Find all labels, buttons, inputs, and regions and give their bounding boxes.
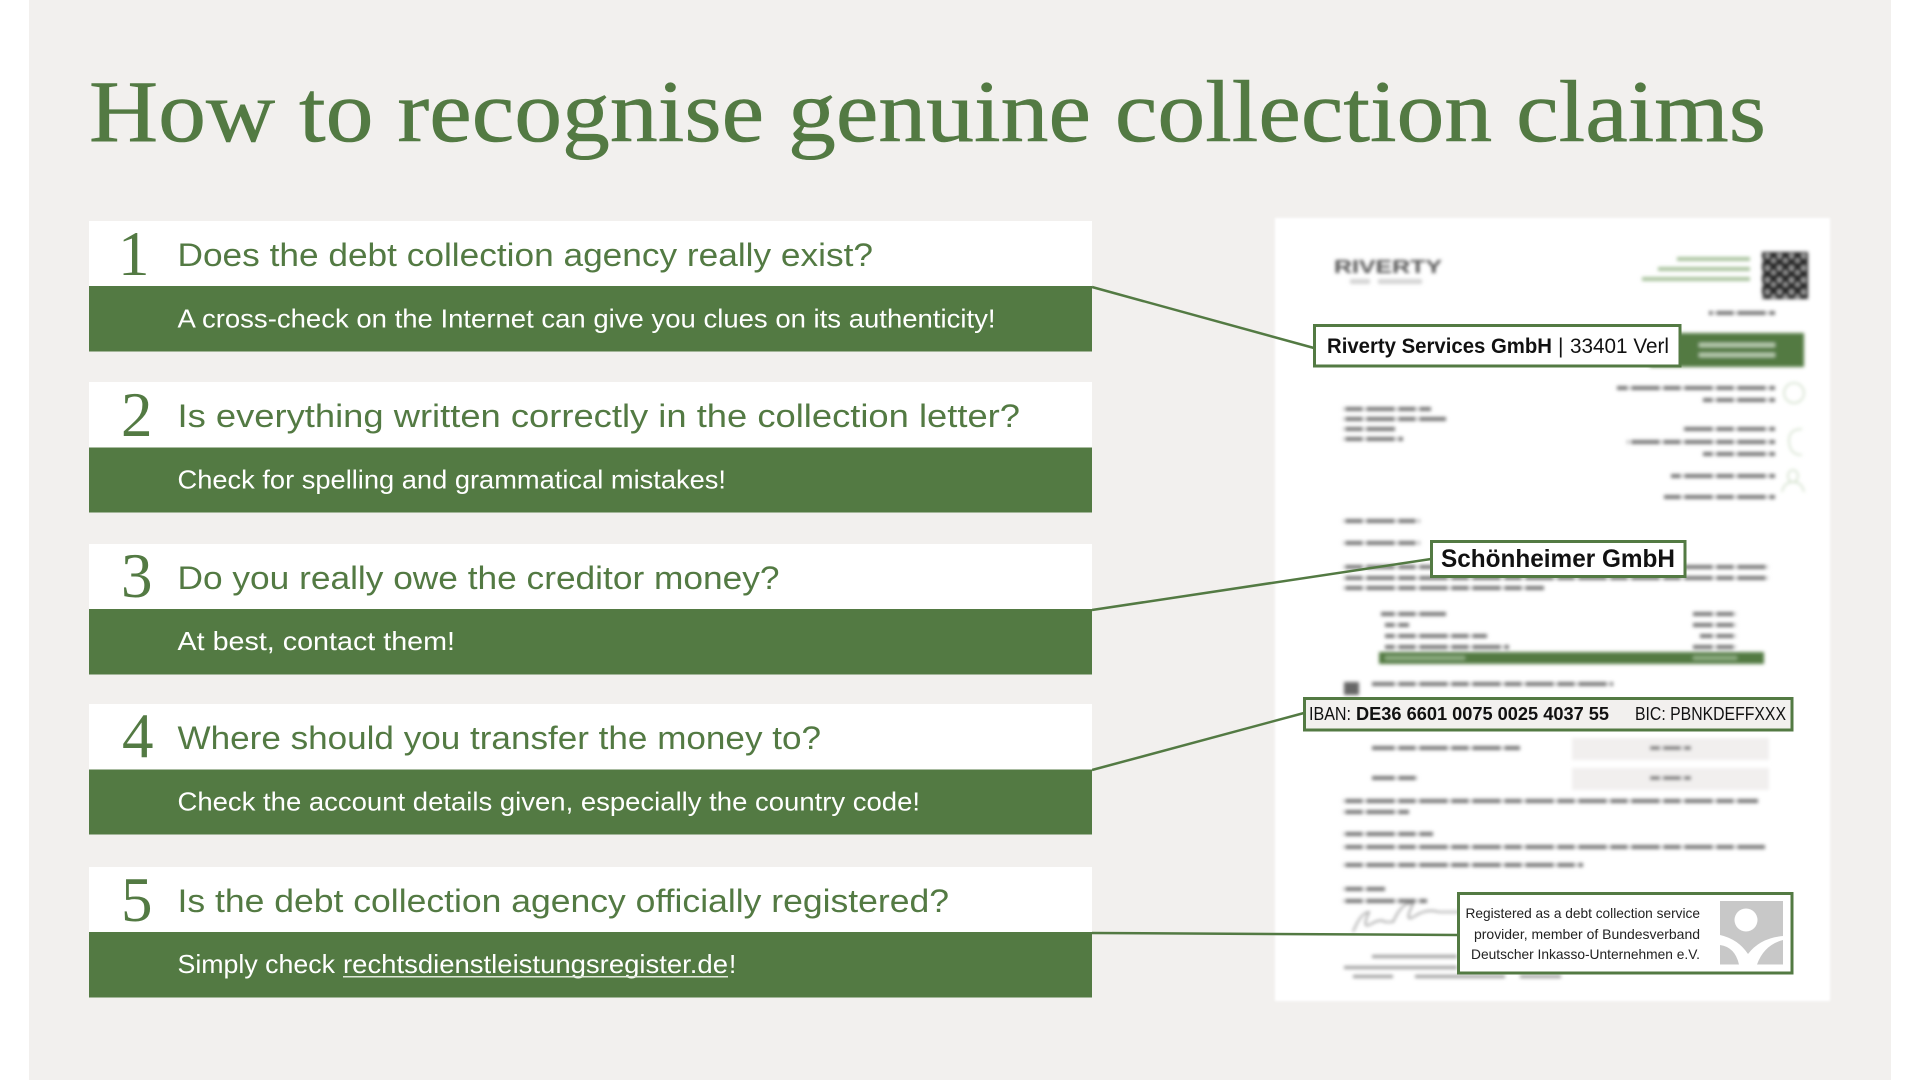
answer 5: Simply check <box>178 949 336 979</box>
number 5: 5 <box>121 865 152 935</box>
question 3: Do you really owe the creditor money? <box>178 560 780 596</box>
question 1: Does the debt collection agency really exist? <box>178 237 873 273</box>
callout: company name: 33401 Verl <box>1570 335 1669 358</box>
step 5 <box>89 865 1092 998</box>
callout: company name: Riverty Services GmbH <box>1327 335 1552 358</box>
answer 5 <box>178 949 736 979</box>
number 4: 4 <box>122 701 154 771</box>
number 2: 2 <box>121 380 152 450</box>
callout: bank details: BIC: PBNKDEFFXXX <box>1635 704 1786 724</box>
question 4: Where should you transfer the money to? <box>178 720 821 756</box>
connector: step 1 to company name <box>1092 287 1314 348</box>
step 4 <box>89 701 1092 834</box>
callout: registration note: Registered as a debt collection service <box>1466 905 1700 921</box>
callout: registration note: Deutscher Inkasso-Unternehmen e.V. <box>1471 946 1700 962</box>
question 2: Is everything written correctly in the collection letter? <box>178 398 1020 434</box>
answer 3: At best, contact them! <box>178 626 455 656</box>
question 5: Is the debt collection agency officially registered? <box>178 883 949 919</box>
step 3 <box>89 541 1092 674</box>
answer 5: rechtsdienstleistungsregister.de <box>343 949 728 979</box>
number 1: 1 <box>118 219 150 289</box>
answer 1: A cross-check on the Internet can give you clues on its authenticity! <box>178 304 996 334</box>
step 2 <box>89 380 1092 512</box>
callout: bank details: IBAN: <box>1309 704 1351 724</box>
icon: association logo <box>1720 901 1783 964</box>
callout: bank details <box>1304 698 1792 730</box>
connector: step 5 to registration note <box>1092 933 1458 935</box>
callout: registration note: provider, member of Bundesverband <box>1474 926 1700 942</box>
connector: step 4 to bank details <box>1092 713 1304 770</box>
callout: company name <box>1314 326 1680 366</box>
callout: registration note <box>1458 894 1792 973</box>
document: blurred collection letter: RIVERTY <box>1334 257 1442 277</box>
callout: company name: | <box>1558 335 1563 358</box>
step 1 <box>89 219 1092 352</box>
document: blurred collection letter <box>1275 218 1830 1001</box>
callout: bank details: DE36 6601 0075 0025 4037 55 <box>1356 704 1609 724</box>
title: How to recognise genuine collection claims <box>89 64 1766 161</box>
answer 4: Check the account details given, especially the country code! <box>178 786 920 816</box>
callout: creditor name: Schönheimer GmbH <box>1441 545 1675 573</box>
answer 5: ! <box>729 949 736 979</box>
connector: step 3 to creditor name <box>1092 559 1431 610</box>
number 3: 3 <box>121 541 152 611</box>
answer 2: Check for spelling and grammatical mistakes! <box>178 464 726 494</box>
